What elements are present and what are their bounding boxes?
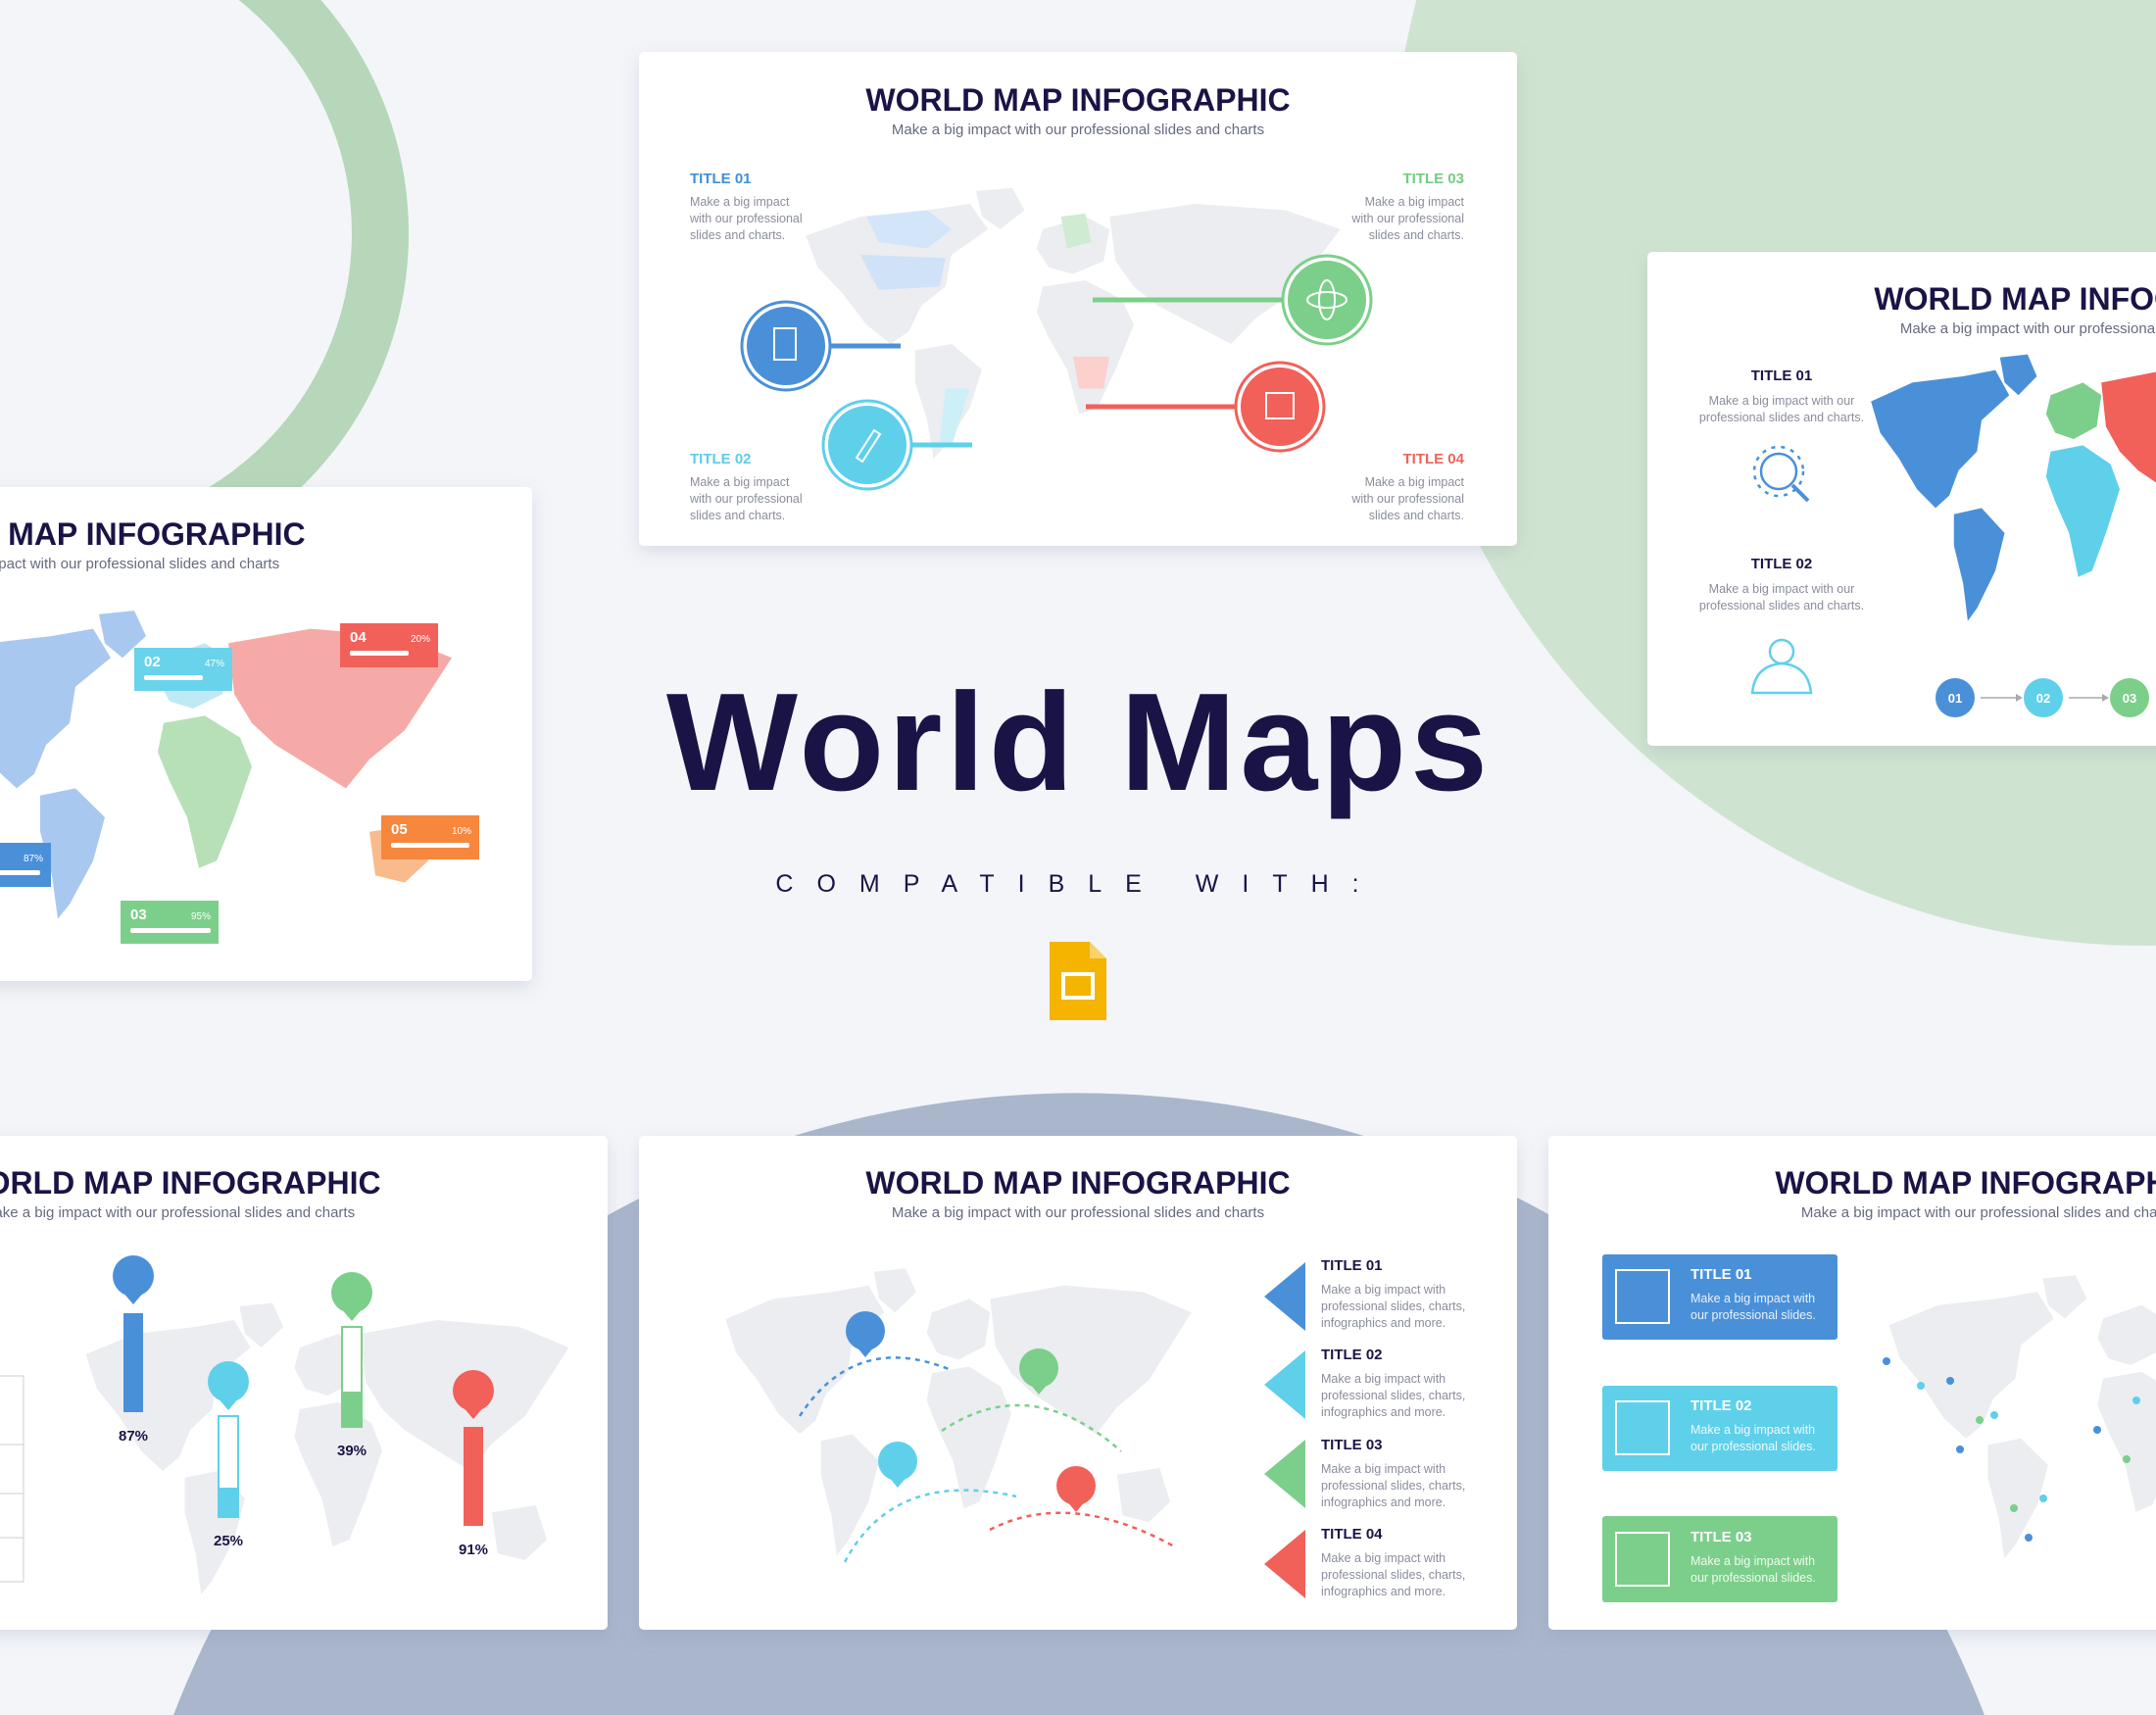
label 03 xyxy=(121,901,219,944)
heading xyxy=(865,1165,1291,1221)
text: title 04 xyxy=(1350,451,1465,522)
bar 39%: 39% xyxy=(337,1443,367,1459)
text: title 01: with our professional xyxy=(689,212,803,225)
background green ring xyxy=(0,0,380,559)
icon: cyan circle xyxy=(823,401,972,489)
text: title 02: with our professional xyxy=(689,492,803,506)
box: title 02: our professional slides. xyxy=(1690,1440,1816,1453)
box: title 02: TITLE 02 xyxy=(1690,1397,1752,1414)
text: title 02: Make a big impact with our xyxy=(1709,582,1854,596)
list: titles 01-04: TITLE 04 xyxy=(1321,1526,1383,1543)
box: title 02 xyxy=(1602,1386,1838,1471)
text: title 01: TITLE 01 xyxy=(1751,368,1812,384)
bar 91%: 91% xyxy=(459,1542,488,1558)
steps 01-03: 03 xyxy=(2123,691,2136,706)
icon: virus xyxy=(1754,447,1808,501)
map: colored continents xyxy=(0,611,452,919)
label 02: 02 xyxy=(144,654,161,670)
label 03: 95% xyxy=(191,911,211,922)
text: title 03: with our professional xyxy=(1350,212,1464,225)
table stub xyxy=(0,1376,24,1582)
text: title 02 xyxy=(1699,556,1864,612)
card: bottom center (routes) xyxy=(639,1136,1517,1630)
heading: WORLD MAP INFOGRAPHIC xyxy=(865,1165,1291,1200)
box: title 03 xyxy=(1602,1516,1838,1602)
bar 91% xyxy=(453,1370,494,1558)
text: title 01: slides and charts. xyxy=(690,228,785,242)
text: title 01 xyxy=(1699,368,1864,424)
text: title 01 xyxy=(689,171,803,242)
text: title 02: Make a big impact xyxy=(690,475,790,489)
label 04: 20% xyxy=(411,634,430,645)
box: title 01 xyxy=(1602,1254,1838,1340)
box: title 01: Make a big impact with xyxy=(1690,1292,1815,1305)
text: title 01: professional slides and charts. xyxy=(1699,411,1864,424)
bar 25%: 25% xyxy=(214,1533,243,1549)
list: titles 01-04 xyxy=(1264,1257,1465,1598)
subtitle: compatible with: COMPATIBLE WITH: xyxy=(775,870,1383,898)
card: right (regions) xyxy=(1647,252,2156,746)
text: title 03: slides and charts. xyxy=(1369,228,1464,242)
box: title 01: our professional slides. xyxy=(1690,1308,1816,1322)
icon: person xyxy=(1752,640,1811,693)
heading xyxy=(1874,281,2156,337)
heading xyxy=(0,516,306,572)
text: title 03: TITLE 03 xyxy=(1402,171,1464,187)
bar 87% xyxy=(113,1255,154,1445)
map xyxy=(86,1303,568,1594)
steps 01-03 xyxy=(1936,678,2149,717)
label 01 xyxy=(0,843,51,887)
text: title 01: Make a big impact with our xyxy=(1709,394,1854,408)
list: titles 01-04: infographics and more. xyxy=(1321,1585,1446,1598)
heading: Make a big impact with our professional slides and charts xyxy=(892,122,1264,138)
list: titles 01-04: infographics and more. xyxy=(1321,1316,1446,1330)
text: title 02: professional slides and charts. xyxy=(1699,599,1864,612)
label 03: 03 xyxy=(130,906,147,923)
text: title 01: Make a big impact xyxy=(690,195,790,209)
list: titles 01-04: TITLE 02 xyxy=(1321,1347,1383,1363)
list: titles 01-04: professional slides, charts, xyxy=(1321,1389,1465,1402)
routes xyxy=(800,1357,1176,1562)
steps 01-03: 02 xyxy=(2036,691,2050,706)
label 05: 10% xyxy=(452,826,471,837)
background blue half circle xyxy=(173,1093,1984,1715)
text: title 02 xyxy=(689,451,803,522)
label 04: 04 xyxy=(350,629,367,646)
label 05 xyxy=(381,815,479,859)
map with dots xyxy=(1883,1275,2156,1558)
text: title 04: slides and charts. xyxy=(1369,509,1464,522)
text: title 04: with our professional xyxy=(1350,492,1464,506)
box: title 03: our professional slides. xyxy=(1690,1571,1816,1585)
card: left (colored map) xyxy=(0,487,532,981)
list: titles 01-04: TITLE 01 xyxy=(1321,1257,1383,1274)
icon: blue circle xyxy=(742,302,901,390)
box: title 03: Make a big impact with xyxy=(1690,1554,1815,1568)
bar 39% xyxy=(331,1272,372,1459)
steps 01-03: 01 xyxy=(1948,691,1962,706)
list: titles 01-04: professional slides, charts, xyxy=(1321,1568,1465,1582)
card: bottom left (bars) xyxy=(0,1136,608,1630)
map: regions xyxy=(1871,355,2156,621)
label 04 xyxy=(340,623,438,667)
card: bottom right (boxes) xyxy=(1548,1136,2156,1630)
list: titles 01-04: Make a big impact with xyxy=(1321,1462,1446,1476)
list: titles 01-04: professional slides, charts, xyxy=(1321,1479,1465,1493)
heading xyxy=(0,1165,381,1221)
text: title 04: Make a big impact xyxy=(1365,475,1465,489)
list: titles 01-04: Make a big impact with xyxy=(1321,1551,1446,1565)
icon: google slides xyxy=(1050,942,1106,1020)
label 01: 87% xyxy=(24,854,43,864)
list: titles 01-04: Make a big impact with xyxy=(1321,1283,1446,1297)
list: titles 01-04: infographics and more. xyxy=(1321,1405,1446,1419)
label 02 xyxy=(134,648,232,691)
background green circle xyxy=(1392,0,2156,946)
text: title 03 xyxy=(1350,171,1465,242)
text: title 02: slides and charts. xyxy=(690,509,785,522)
icon: red circle xyxy=(1086,363,1324,451)
card: top center xyxy=(639,52,1517,546)
center title: World Maps xyxy=(666,664,1492,820)
label 05: 05 xyxy=(391,821,408,838)
bar 87%: 87% xyxy=(119,1428,148,1445)
pins xyxy=(846,1311,1096,1512)
box: title 01: TITLE 01 xyxy=(1690,1266,1752,1283)
heading: WORLD MAP INFOGRAPHIC xyxy=(865,82,1291,118)
text: title 01: TITLE 01 xyxy=(690,171,752,187)
list: titles 01-04: Make a big impact with xyxy=(1321,1372,1446,1386)
heading: Make a big impact with our professional slides and charts xyxy=(892,1204,1264,1221)
text: title 02: TITLE 02 xyxy=(1751,556,1812,572)
text: title 04: TITLE 04 xyxy=(1402,451,1465,467)
heading xyxy=(865,82,1291,138)
bar 25% xyxy=(208,1361,249,1549)
list: titles 01-04: TITLE 03 xyxy=(1321,1437,1383,1453)
list: titles 01-04: professional slides, charts, xyxy=(1321,1299,1465,1313)
heading xyxy=(1775,1165,2156,1221)
label 02: 47% xyxy=(205,659,224,669)
map xyxy=(725,1268,1192,1556)
list: titles 01-04: infographics and more. xyxy=(1321,1495,1446,1509)
icon: green circle xyxy=(1093,256,1371,344)
text: title 03: Make a big impact xyxy=(1365,195,1465,209)
box: title 02: Make a big impact with xyxy=(1690,1423,1815,1437)
map xyxy=(806,188,1341,459)
box: title 03: TITLE 03 xyxy=(1690,1529,1752,1545)
text: title 02: TITLE 02 xyxy=(690,451,752,467)
